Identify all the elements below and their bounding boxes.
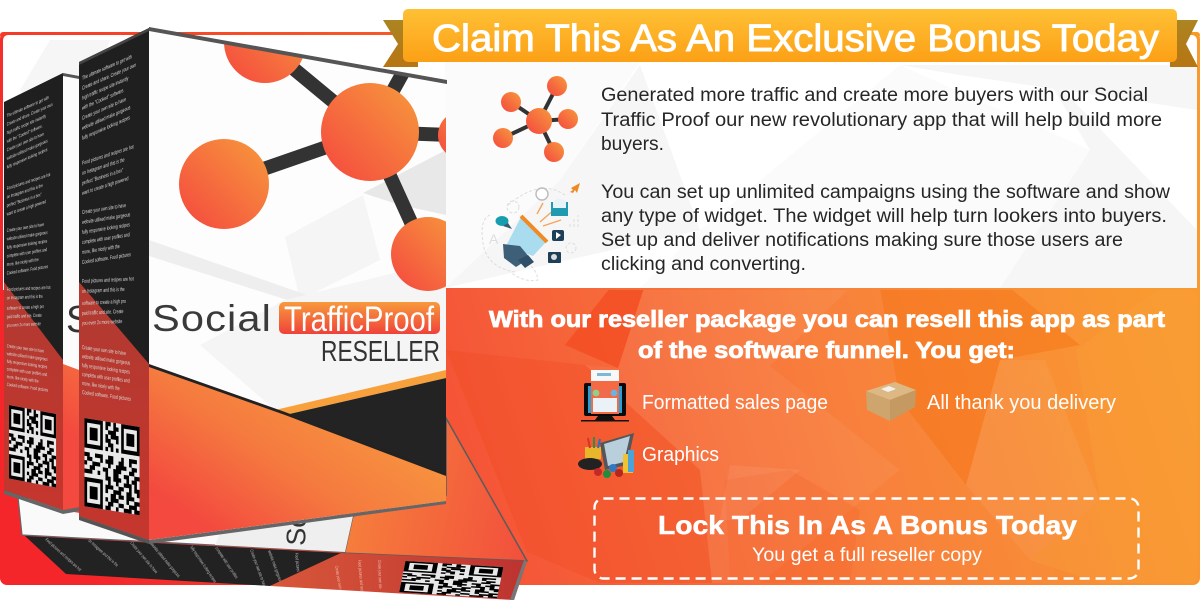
front box spine: on Instagram and this is the	[82, 286, 125, 294]
back box white front: S	[66, 299, 91, 341]
box logo: TrafficProof badge: TrafficProof	[284, 300, 434, 339]
front box spine: fully responsive looking recipes	[82, 362, 130, 375]
front box spine: want to create a high powered	[82, 175, 129, 197]
feature: delivery label: All thank you delivery	[927, 392, 1116, 414]
icon: cardboard box	[866, 382, 916, 421]
text block: intro paragraphs: Traffic Proof our new revolutionary app that will help build more	[601, 110, 1162, 131]
front box spine: complete with user profiles and	[82, 371, 130, 384]
front box spine	[79, 28, 149, 544]
back box spine: fully responsive looking recipes	[7, 238, 47, 250]
back box spine: The ultimate software to get with	[7, 94, 49, 119]
text block: intro paragraphs: You can set up unlimited campaigns using the software and show	[601, 182, 1170, 203]
panel: orange facets	[469, 290, 1100, 583]
lying box dark side: website make gorgeous	[267, 549, 284, 583]
front box spine: on Instagram and this is the	[82, 156, 125, 177]
text block: intro paragraphs: buyers.	[601, 134, 664, 155]
front box spine: Create your own site to have	[82, 202, 126, 215]
ribbon title: Claim This As An Exclusive Bonus Today	[432, 18, 1159, 60]
heading: reseller package	[489, 306, 1165, 363]
callout heading: Lock This In As A Bonus Today	[658, 510, 1078, 540]
front box spine: fully responsive looking recipes	[82, 114, 130, 142]
lying box white face	[18, 497, 353, 552]
front box spine: you even 2x more website	[82, 318, 123, 326]
front box spine: website utilised make gorgeous	[82, 353, 131, 366]
lying box dark side: website utilised make gorgeous	[149, 541, 182, 578]
lying box top face	[341, 418, 527, 561]
lying box white face: So	[281, 512, 312, 546]
back box spine: Create your own site to have	[7, 221, 45, 233]
front box spine: fully responsive looking recipes	[82, 221, 130, 235]
back box spine: Create and share. Create your own	[7, 101, 52, 127]
heading: reseller package: With our reseller package you can resell this app as part	[489, 306, 1165, 332]
back box spine: more, like nicely with the	[7, 256, 39, 267]
lying box dark side: on Instagram and this is the	[87, 538, 120, 568]
front box spine: paid traffic and site. Create	[82, 308, 124, 316]
lying box red side: Food pictures and recipes	[357, 560, 366, 596]
lying box dark side: Food pictures	[294, 553, 302, 572]
back box spine: fully responsive looking recipes	[7, 358, 47, 370]
front box spine: website utilised make gorgeous	[82, 211, 131, 225]
lying box dark side: fully responsive looking recipes	[189, 544, 218, 584]
back box spine: Cooked software. Food pictures	[7, 263, 48, 276]
feature: sales page label: Formatted sales page	[642, 392, 828, 414]
product: front box	[79, 27, 447, 544]
back box spine: paid traffic and site. Create	[7, 312, 42, 320]
front box spine: complete with user profiles and	[82, 231, 130, 245]
product: lying box	[18, 418, 527, 600]
ribbon banner	[383, 9, 1198, 67]
lying box dark side	[25, 536, 341, 588]
text block: intro paragraphs: Generated more traffic and create more buyers with our Social	[601, 85, 1148, 106]
back box spine: website utilised make gorgeous	[7, 137, 48, 161]
ribbon left tail	[383, 20, 418, 67]
back box spine: website utilised make gorgeous	[7, 350, 48, 362]
back box spine: more, like nicely with the	[7, 373, 39, 384]
back box spine: want to create a high powered	[7, 198, 46, 217]
front box spine: Cooked software. Food pictures	[82, 251, 131, 265]
lying box red side	[270, 553, 527, 600]
back box spine: Food pictures and recipes are hot	[7, 171, 51, 191]
back box spine: on Instagram and this is the	[7, 182, 43, 200]
lying box dark side: Food pictures and recipes are hot	[44, 537, 83, 573]
front box spine: website utilised make gorgeous	[82, 104, 131, 132]
front box spine: more, like nicely with the	[82, 380, 120, 392]
lying box dark side: complete with user profiles	[214, 545, 240, 580]
back box spine: complete with user profiles and	[7, 366, 47, 377]
box logo: Social: Social	[152, 298, 272, 339]
text block: intro paragraphs: Set up and deliver notifications making sure those users are	[601, 230, 1123, 251]
back box spine: website utilised make gorgeous	[7, 229, 48, 242]
lying box red side: Create your own site	[377, 560, 384, 589]
back box spine: with the "Cooked" software.	[7, 123, 43, 144]
back box spine: high traffic recipe site instantly	[7, 112, 47, 136]
front box spine: software to create a high pro	[82, 298, 126, 306]
back box spine	[4, 73, 80, 514]
ribbon bar	[403, 9, 1177, 62]
back box spine: Cooked software. Food pictures	[7, 381, 48, 393]
back box spine: software to create a high pro	[7, 303, 45, 311]
back box spine: Create your own site to have	[7, 343, 45, 354]
front box spine: The ultimate software to get with	[82, 54, 132, 82]
front box spine: perfect "Business in a box"	[82, 167, 123, 187]
back box spine: Food pictures and recipes are hot	[7, 284, 51, 292]
front box spine: Cooked software. Food pictures	[82, 389, 131, 402]
front box spine: high traffic recipe site instantly	[82, 75, 129, 102]
back box white front	[63, 73, 91, 520]
icon: megaphone marketing: A	[489, 231, 499, 247]
back box spine: Create your own site to have	[7, 130, 45, 153]
back box spine: on Instagram and this is the	[7, 293, 43, 301]
front box spine: Create your own site to have	[82, 96, 126, 122]
front box face	[149, 27, 447, 544]
front box spine: with the "Cooked" software.	[82, 87, 124, 112]
ribbon right tail	[1170, 20, 1198, 67]
front box spine: Create and share. Create your own	[82, 62, 136, 92]
product: back box	[4, 73, 79, 514]
text block: intro paragraphs: clicking and converting.	[601, 254, 806, 275]
feature: graphics label: Graphics	[642, 444, 719, 466]
callout subtext: You get a full reseller copy	[752, 545, 983, 566]
lying box dark side: Create your own site to have	[129, 540, 159, 574]
back box spine: perfect "Business in a box"	[7, 191, 42, 208]
icon: network nodes	[493, 76, 578, 162]
back box spine: you even 2x more website	[7, 320, 41, 328]
icon: megaphone marketing	[482, 183, 580, 281]
text block: intro paragraphs	[601, 85, 1170, 275]
front box QR code	[84, 418, 140, 515]
lying box QR code	[399, 561, 503, 598]
front box spine: Create your own site to have	[82, 344, 126, 356]
back box spine: complete with user profiles and	[7, 246, 47, 259]
text block: intro paragraphs: any type of widget. The widget will help turn lookers into buyers.	[601, 206, 1167, 227]
front box spine: more, like nicely with the	[82, 243, 120, 255]
front box spine: Food pictures and recipes are hot	[82, 276, 134, 284]
front box spine: Food pictures and recipes are hot	[82, 143, 134, 167]
back box spine: fully responsive looking recipes	[7, 146, 47, 170]
heading: reseller package: of the software funnel. You get:	[638, 337, 1015, 363]
back box QR code	[9, 405, 56, 488]
lying box dark side: Create your own site to have	[249, 548, 268, 588]
icon: graphics tablet collage	[578, 433, 634, 478]
icon: sales page monitor	[581, 370, 629, 422]
lying box red side: Create your own site	[334, 565, 345, 595]
box logo: RESELLER: RESELLER	[321, 336, 440, 368]
callout: bonus call to action	[594, 498, 1138, 578]
